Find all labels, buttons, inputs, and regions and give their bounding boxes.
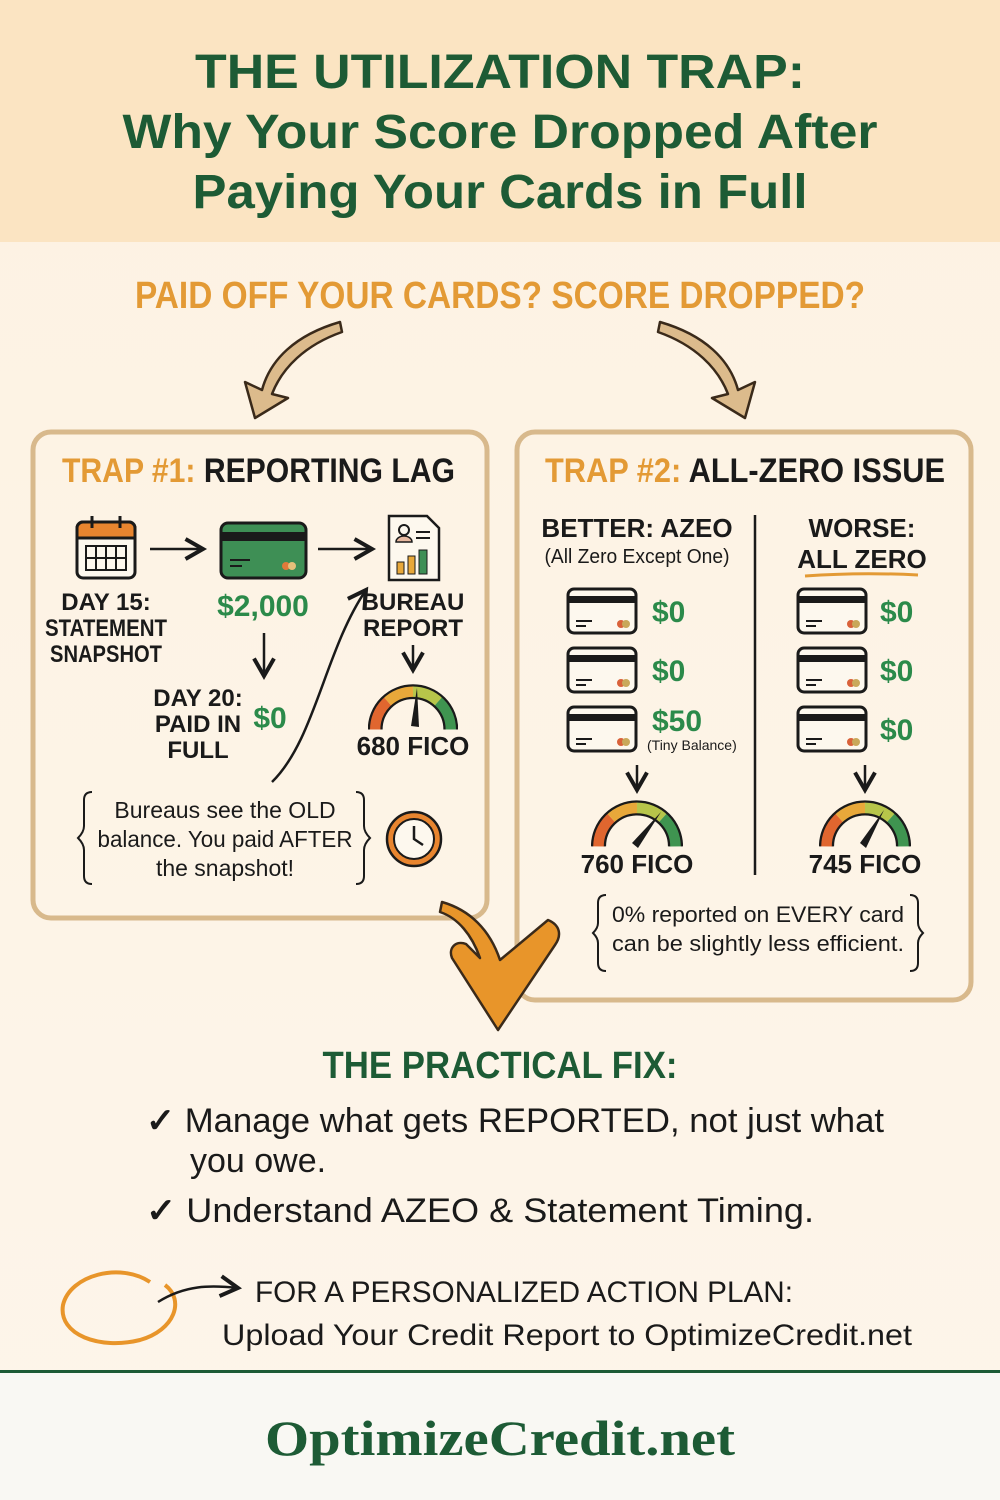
icon: bureau report [389,516,439,580]
panel: trap 2: BETTER: AZEO [541,513,733,543]
footer: OptimizeCredit.net [265,1410,735,1466]
callout trap 1: Bureaus see the OLD [114,797,336,823]
subtitle: PAID OFF YOUR CARDS? SCORE DROPPED? [135,275,865,317]
panel: trap 1 [33,432,487,918]
callout trap 2 [593,895,923,971]
callout trap 2: 0% reported on EVERY card [612,902,904,927]
cards AZEO: $0 [652,596,685,629]
icon: green card [221,523,306,578]
panel: trap 1: BUREAU [362,589,464,616]
label day 20: FULL [167,737,229,764]
call to action: Upload Your Credit Report to OptimizeCredit.net [222,1319,913,1352]
label day 15: SNAPSHOT [50,641,162,668]
arrow [150,548,203,550]
arrow: right curved [658,322,755,418]
header band [0,0,1000,242]
label day 20: DAY 20: [153,685,243,712]
panel: trap 1: $0 [253,702,287,735]
panel: trap 1: $2,000 [217,590,309,623]
fix list: ✓ Manage what gets REPORTED, not just what [146,1102,885,1140]
heading: practical fix: THE PRACTICAL FIX: [322,1045,678,1087]
call to action [222,1276,913,1352]
icon: clock [387,812,441,866]
panel: trap 2: 745 FICO [809,849,921,879]
fix list: ✓ Understand AZEO & Statement Timing. [146,1192,814,1230]
gauge 680 [369,685,457,730]
cards AZEO: $0 [652,655,685,688]
icon: orange circle with arrow [63,1272,238,1343]
cards AZEO: $50 [652,705,702,738]
arrow: left curved [245,322,342,418]
panel: trap 2: (All Zero Except One) [544,546,730,568]
label day 20: PAID IN [155,711,241,738]
title: Why Your Score Dropped After [122,106,878,159]
panel: trap 1: 680 FICO [357,731,469,761]
curved arrow [272,590,366,782]
footer [0,1370,1000,1500]
heading trap 2: TRAP #2: ALL-ZERO ISSUE [545,452,945,490]
gauge 760 [592,802,682,848]
cards all zero: $0 [880,714,913,747]
cards all zero: $0 [880,596,913,629]
cards AZEO: (Tiny Balance) [647,737,737,753]
title: Paying Your Cards in Full [192,166,808,219]
heading trap 1: TRAP #1: REPORTING LAG [62,452,455,490]
gauge 745 [820,802,910,848]
panel: trap 2 [517,432,971,1000]
label day 15 [45,589,167,668]
callout trap 2: can be slightly less efficient. [612,931,904,956]
fix list [146,1102,885,1230]
fix list: you owe. [190,1142,326,1180]
title [122,46,878,219]
callout trap 1: the snapshot! [156,855,294,881]
label day 15: DAY 15: [61,589,151,616]
icon: calendar [77,516,135,578]
panel: trap 2: 760 FICO [581,849,693,879]
callout trap 1: balance. You paid AFTER [98,826,352,852]
panel: trap 2: WORSE: [809,513,915,543]
callout trap 1 [78,792,370,884]
label day 15: STATEMENT [45,615,167,642]
cards all zero: $0 [880,655,913,688]
title: THE UTILIZATION TRAP: [195,46,805,99]
cards all zero [798,589,913,751]
panel: trap 2: ALL ZERO [797,544,927,574]
cards AZEO [568,589,737,753]
call to action: FOR A PERSONALIZED ACTION PLAN: [255,1276,793,1309]
label day 20 [153,685,243,764]
arrow: big orange down [440,902,559,1030]
panel: trap 1: REPORT [363,615,463,642]
